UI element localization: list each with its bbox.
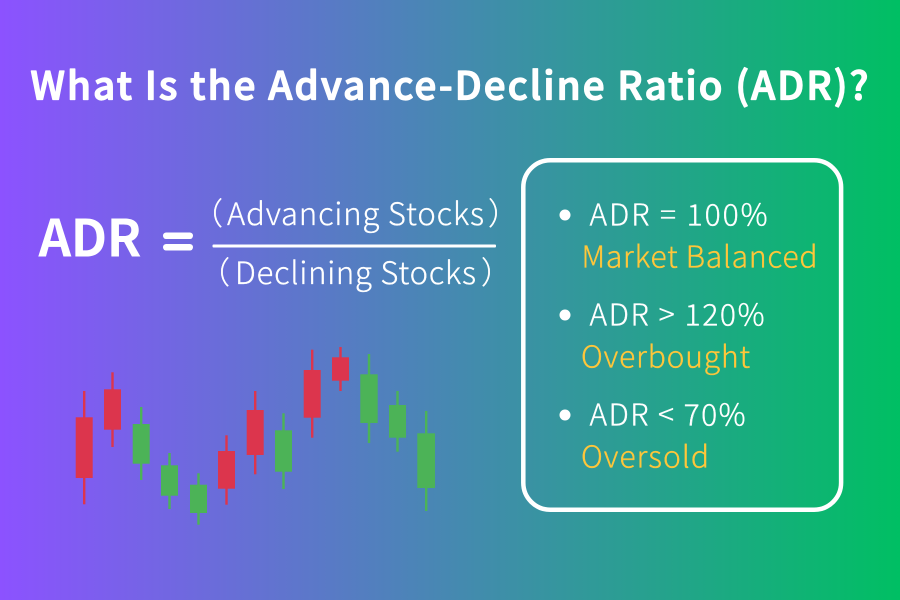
candle 10 red bbox=[332, 347, 349, 391]
level: ADR = 100% bbox=[590, 190, 768, 234]
denominator: （ bbox=[199, 248, 230, 293]
candle 9 red bbox=[304, 350, 321, 438]
bullet bbox=[560, 410, 570, 420]
candle 13 green bbox=[417, 411, 435, 511]
candle 11 green bbox=[360, 354, 378, 443]
meaning: Overbought bbox=[581, 332, 750, 376]
numerator: （ bbox=[192, 189, 223, 234]
candle 7 red bbox=[247, 391, 264, 474]
title: What Is the Advance-Decline Ratio (ADR)? bbox=[30, 56, 868, 112]
meaning: Market Balanced bbox=[582, 232, 818, 276]
bullet bbox=[560, 210, 570, 220]
level: ADR < 70% bbox=[590, 390, 746, 434]
candle 12 green bbox=[389, 391, 406, 452]
candle 2 red bbox=[104, 372, 121, 447]
candle 4 green bbox=[161, 453, 178, 509]
candle 5 green bbox=[190, 473, 207, 525]
fraction line bbox=[212, 244, 496, 248]
numerator: ） bbox=[488, 189, 519, 234]
equals sign bbox=[163, 232, 193, 250]
item: market balanced bbox=[560, 190, 818, 276]
item: overbought bbox=[560, 290, 764, 376]
item: oversold bbox=[560, 390, 746, 476]
denominator: Declining Stocks bbox=[235, 248, 476, 293]
panel border bbox=[523, 160, 841, 510]
candlestick chart bbox=[76, 347, 435, 525]
formula bbox=[38, 189, 519, 293]
candle 6 red bbox=[218, 435, 235, 505]
candle 3 green bbox=[133, 407, 150, 480]
meaning: Oversold bbox=[581, 432, 709, 476]
bullet bbox=[560, 310, 570, 320]
numerator: Advancing Stocks bbox=[227, 189, 484, 234]
panel: ADR levels bbox=[523, 160, 841, 510]
candle 1 red bbox=[76, 391, 93, 504]
denominator: ） bbox=[481, 248, 512, 293]
level: ADR > 120% bbox=[590, 290, 764, 334]
formula left side: ADR bbox=[38, 198, 142, 272]
candle 8 green bbox=[275, 413, 292, 489]
